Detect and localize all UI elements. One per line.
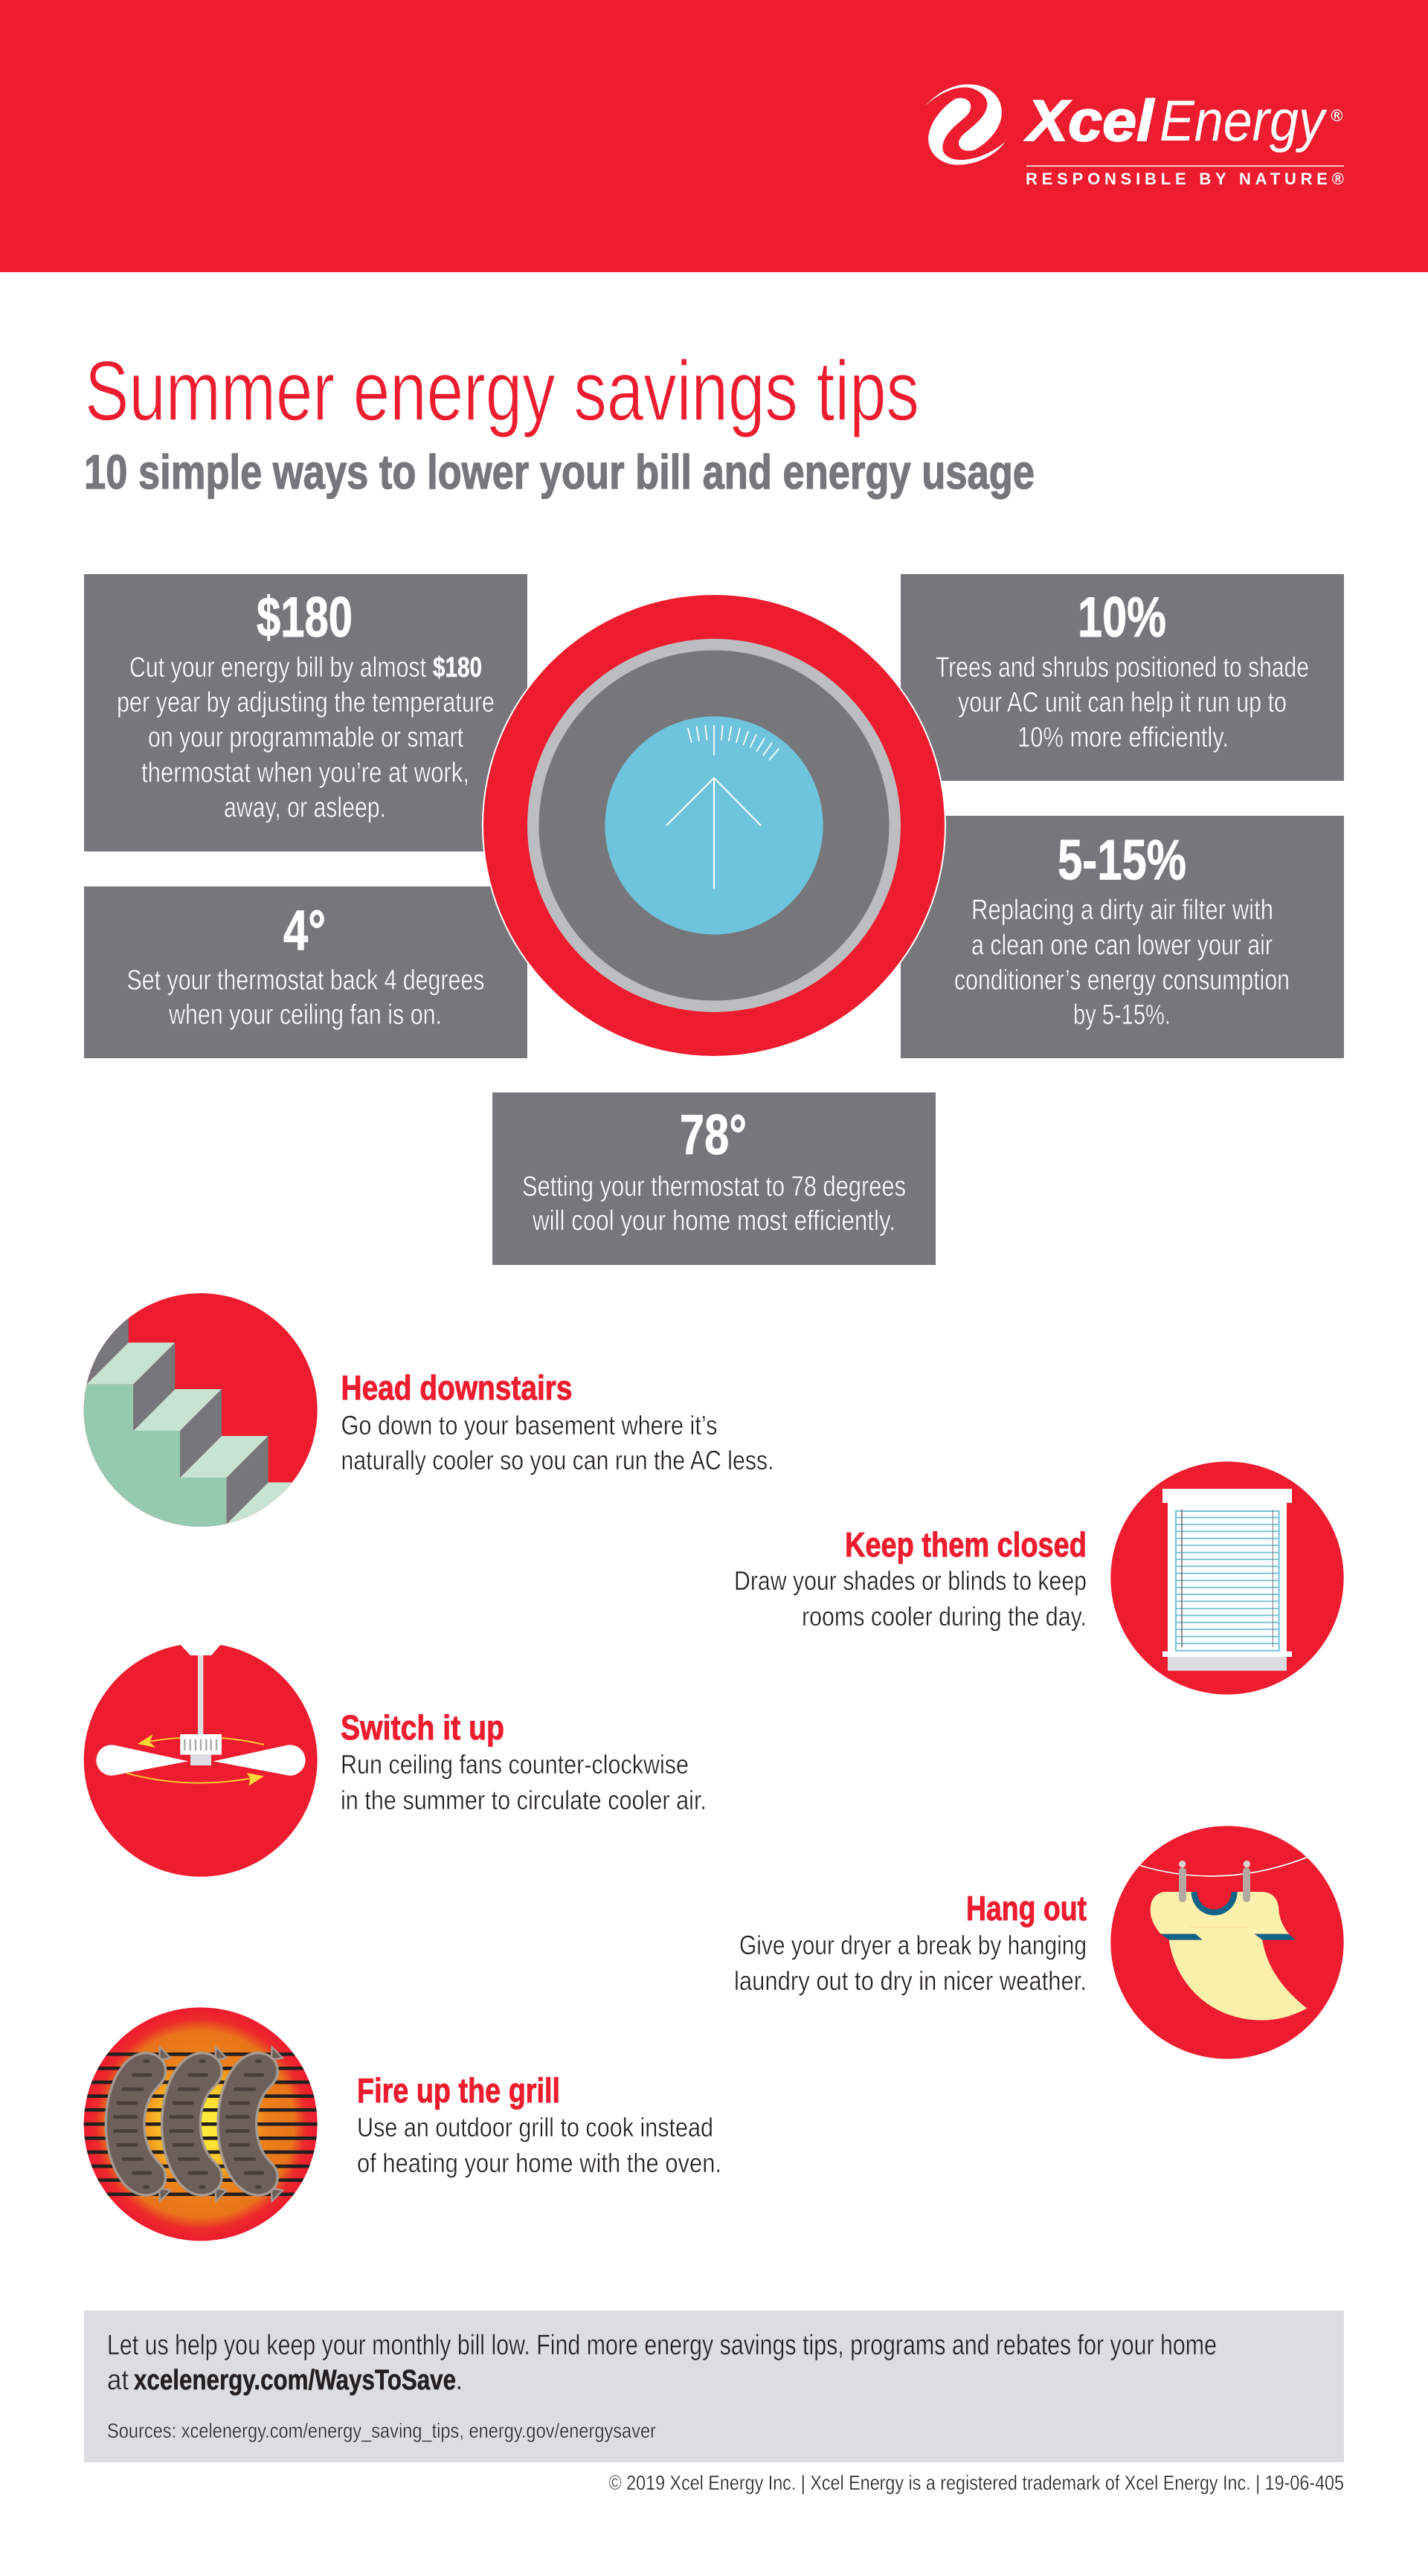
footer call to action panel: [84, 2311, 1344, 2462]
icon: stairs: [83, 1293, 318, 1527]
bottom rotation arrow: [126, 1773, 264, 1786]
tip: switch it up: Run ceiling fans counter-clockwise: [341, 1749, 689, 1780]
thermostat dial: [482, 593, 946, 1057]
panel: 4 degrees: Set your thermostat back 4 degrees: [126, 965, 485, 996]
icon: window blinds: [1110, 1461, 1344, 1695]
panel: $180: away, or asleep.: [224, 793, 386, 824]
tip: hang out: [734, 1889, 1087, 1996]
panel: 5-15 percent: 5-15%: [1058, 828, 1186, 892]
tip: head downstairs: Go down to your basement where it’s: [341, 1410, 717, 1440]
panel: 10 percent: your AC unit can help it run up to: [958, 687, 1287, 718]
panel: 4 degrees: when your ceiling fan is on.: [168, 999, 442, 1031]
panel: $180: $180: [257, 586, 353, 649]
logo wordmark: Xcel: [1024, 88, 1154, 153]
panel: 10 percent: 10%: [1078, 586, 1166, 649]
footer call to action panel: Sources: xcelenergy.com/energy_saving_tips, energy.gov/energysaver: [107, 2419, 656, 2442]
tip: switch it up: [341, 1708, 707, 1815]
logo wordmark: [1024, 88, 1343, 153]
tip: fire up the grill: Use an outdoor grill to cook instead: [357, 2112, 713, 2142]
tip: fire up the grill: of heating your home with the oven.: [357, 2148, 721, 2178]
subtitle: 10 simple ways to lower your bill and energy usage: [84, 445, 1035, 499]
tip: head downstairs: [341, 1368, 774, 1475]
tip: keep them closed: rooms cooler during the day.: [802, 1601, 1087, 1632]
panel: 5-15 percent: [901, 816, 1344, 1058]
panel: 78 degrees: [492, 1092, 936, 1265]
panel: 78 degrees: 78°: [680, 1104, 747, 1167]
icon: dial pointer arrow: [666, 778, 761, 889]
logo wordmark: Energy: [1160, 88, 1328, 153]
tip: hang out: Give your dryer a break by hanging: [739, 1930, 1087, 1960]
logo tagline: RESPONSIBLE BY NATURE®: [1026, 170, 1344, 188]
footer call to action panel: xcelenergy.com/WaysToSave: [134, 2365, 456, 2396]
panel: $180: thermostat when you’re at work,: [141, 757, 469, 788]
title: Summer energy savings tips: [85, 344, 919, 439]
icon: laundry on a line: [1110, 1826, 1344, 2059]
tip: hang out: laundry out to dry in nicer weather.: [734, 1965, 1087, 1996]
panel: 5-15 percent: conditioner’s energy consumption: [954, 965, 1290, 996]
panel: 78 degrees: Setting your thermostat to 78 degrees: [522, 1171, 906, 1202]
Xcel Energy logo: [924, 84, 1344, 188]
tip: keep them closed: Draw your shades or blinds to keep: [734, 1565, 1087, 1596]
panel: 5-15 percent: Replacing a dirty air filter with: [971, 895, 1273, 926]
footer call to action panel: at: [107, 2365, 129, 2396]
header band: [0, 0, 1428, 272]
tip: fire up the grill: [357, 2071, 721, 2178]
panel: 10 percent: Trees and shrubs positioned to shade: [936, 652, 1309, 683]
panel: 10 percent: 10% more efficiently.: [1017, 722, 1229, 753]
tip: keep them closed: [734, 1525, 1087, 1632]
panel: $180: on your programmable or smart: [148, 722, 463, 753]
tip: head downstairs: naturally cooler so you can run the AC less.: [341, 1445, 774, 1475]
tip: hang out: Hang out: [966, 1889, 1087, 1928]
panel: $180: [84, 574, 527, 851]
panel: 10 percent: [901, 574, 1344, 781]
dial tick marks: [688, 725, 779, 760]
panel: 5-15 percent: by 5-15%.: [1073, 999, 1171, 1031]
panel: 4 degrees: 4°: [283, 899, 326, 962]
logo wordmark: ®: [1331, 106, 1343, 125]
panel: 78 degrees: will cool your home most efficiently.: [532, 1205, 895, 1237]
tip: keep them closed: Keep them closed: [845, 1525, 1087, 1564]
tip: fire up the grill: Fire up the grill: [357, 2071, 560, 2110]
tip: head downstairs: Head downstairs: [341, 1368, 573, 1407]
tip: switch it up: in the summer to circulate cooler air.: [341, 1785, 707, 1815]
panel: $180: $180: [433, 652, 482, 683]
panel: 5-15 percent: a clean one can lower your air: [971, 930, 1273, 961]
logo rule: [1026, 165, 1344, 167]
top rotation arrow: [138, 1734, 264, 1748]
panel: $180: Cut your energy bill by almost: [129, 652, 426, 683]
icon: sausages on grill: [83, 2007, 318, 2241]
icon: ceiling fan: [84, 1641, 318, 1877]
footer call to action panel: .: [455, 2365, 463, 2396]
panel: 4 degrees: [84, 886, 527, 1058]
tip: switch it up: Switch it up: [341, 1708, 504, 1747]
icon: logo swirl: [924, 84, 1006, 165]
panel: $180: per year by adjusting the temperature: [117, 687, 495, 718]
